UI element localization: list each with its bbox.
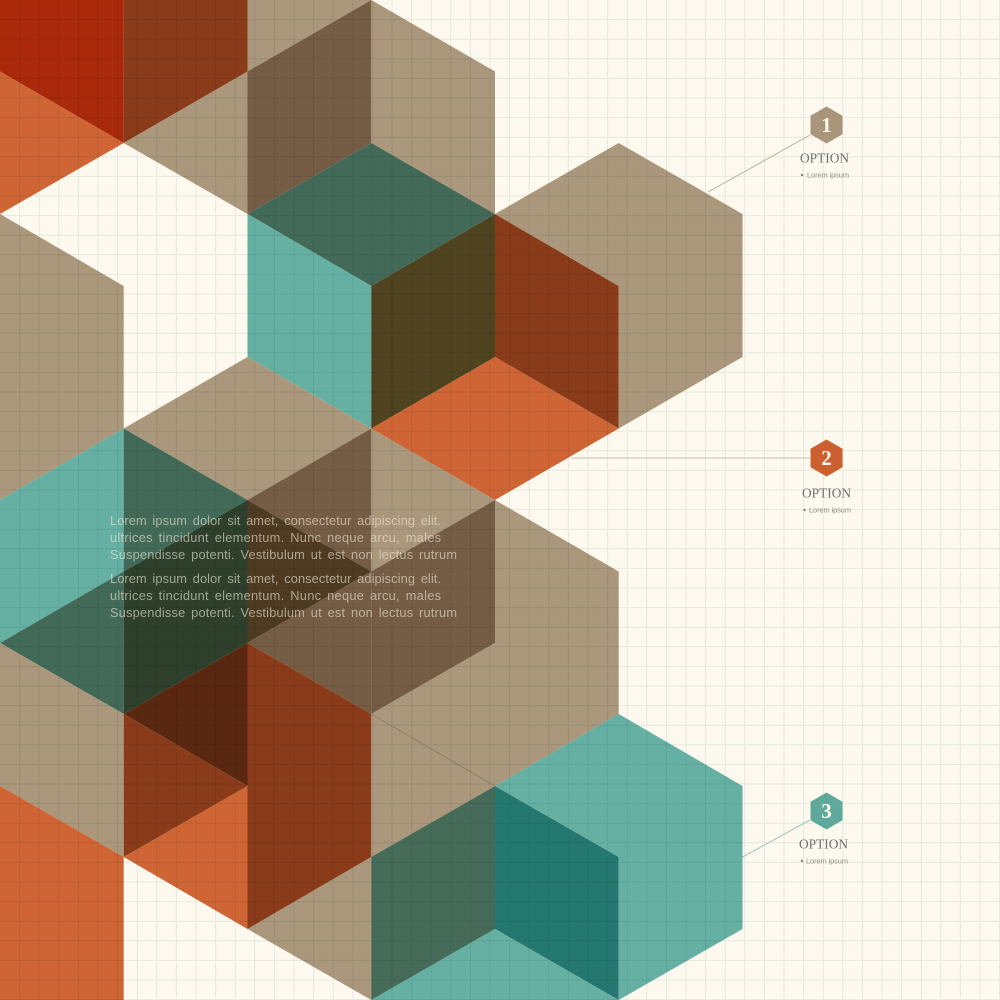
lower-right teal hexagons — [371, 714, 742, 1000]
body text: ultrices tincidunt elementum. Nunc neque arcu, males — [110, 588, 441, 603]
option 1 callout: OPTION — [800, 150, 849, 166]
lower-left hexagons — [0, 643, 495, 1000]
leader line: option 1 — [708, 135, 810, 192]
top centre hexagon and cube — [248, 0, 742, 500]
body text: Lorem ipsum dolor sit amet, consectetur adipiscing elit. — [110, 571, 441, 586]
body text — [110, 513, 457, 620]
option 3 callout: OPTION — [799, 836, 848, 852]
connector line inside tan hexagon — [371, 714, 495, 786]
icon: tan hexagon number 1: 1 — [821, 113, 832, 137]
option 1 callout — [800, 106, 849, 180]
body text: Suspendisse potenti. Vestibulum ut est non lectus rutrum — [110, 605, 457, 620]
middle-left overlapping hexagons — [0, 214, 619, 786]
body text: Suspendisse potenti. Vestibulum ut est non lectus rutrum — [110, 547, 457, 562]
option 1 callout: Lorem ipsum — [807, 170, 849, 180]
top-left hexagon cluster — [0, 0, 248, 214]
option 3 callout — [799, 792, 848, 866]
body text: ultrices tincidunt elementum. Nunc neque arcu, males — [110, 530, 441, 545]
body text: Lorem ipsum dolor sit amet, consectetur adipiscing elit. — [110, 513, 441, 528]
icon: orange hexagon number 2: 2 — [821, 446, 832, 470]
option 3 callout: Lorem ipsum — [806, 856, 848, 866]
option 2 callout: OPTION — [802, 486, 851, 500]
leader line: option 2 — [571, 457, 810, 459]
leader line: option 3 — [742, 820, 810, 857]
option 2 callout: Lorem ipsum — [809, 506, 851, 514]
option 2 callout — [802, 440, 851, 514]
icon: teal hexagon number 3: 3 — [821, 799, 832, 823]
